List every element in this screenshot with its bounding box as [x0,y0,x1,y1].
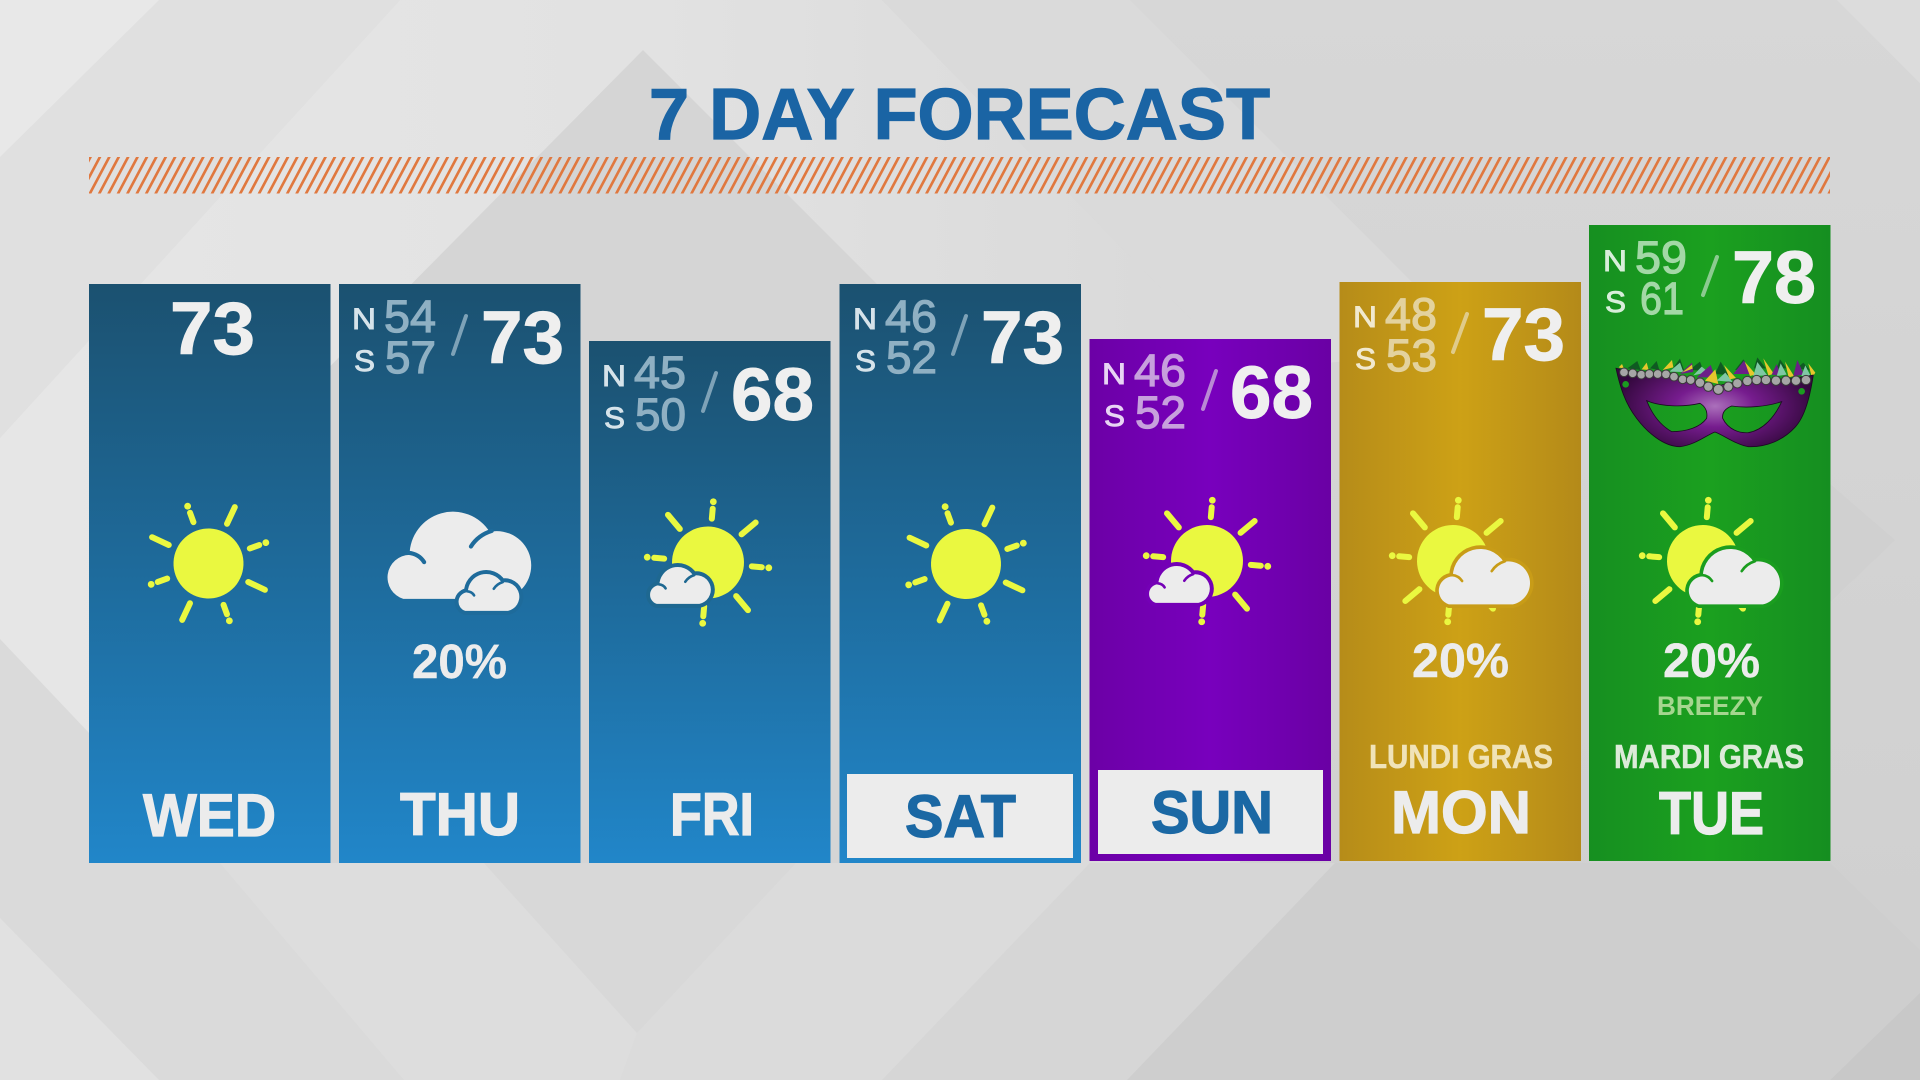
icon: sun behind cloud [1383,491,1530,631]
low and high temperatures: N [1353,301,1377,334]
low and high temperatures: 59 [1635,232,1687,283]
low and high temperatures: 48 [1385,289,1437,340]
precipitation chance: 20% [412,636,507,689]
low and high temperatures: N [853,303,877,336]
low and high temperatures: 61 [1640,273,1684,324]
mask beads [1620,368,1811,394]
low and high temperatures: 52 [1135,387,1186,438]
low and high temperatures: S [1605,286,1626,319]
low and high temperatures: 78 [1732,236,1816,319]
low and high temperatures: 57 [385,332,436,383]
icon: clouds [388,512,531,611]
event label: Mardi Gras: MARDI GRAS [1614,738,1804,775]
panel: Friday [589,341,830,863]
panel: Monday [1340,282,1581,861]
event label: Lundi Gras: LUNDI GRAS [1369,738,1553,775]
low and high temperatures [602,347,814,440]
day label box: SAT [847,774,1073,858]
icon: sun with small cloud [1137,491,1277,631]
day label: TUE: TUE [1659,780,1764,847]
low and high temperatures: 73 [981,296,1064,379]
low and high temperatures: N [602,360,626,393]
low and high temperatures: 73 [1482,293,1565,376]
day label box: SUN [1098,770,1323,854]
low and high temperatures: 54 [384,291,436,342]
icon: sun [883,481,1049,647]
low and high temperatures [1102,345,1313,438]
low and high temperatures: S [604,402,625,435]
low and high temperatures: 46 [885,291,937,342]
panel: Thursday [339,284,580,863]
day label: WED: WED [143,782,276,849]
day label box: SUN: SUN [1151,779,1273,846]
low and high temperatures: S [354,345,375,378]
low and high temperatures: N [1603,245,1627,278]
icon: sun behind cloud [1633,491,1780,631]
day label box: SAT: SAT [905,783,1016,850]
panel: Tuesday [1589,225,1830,861]
low and high temperatures: 46 [1134,345,1186,396]
precipitation chance: 20% [1663,635,1760,688]
low and high temperatures: 53 [1386,330,1437,381]
low and high temperatures: S [1104,400,1125,433]
icon: sun with small cloud [638,493,778,632]
panel: Sunday [1090,339,1331,861]
low and high temperatures [853,291,1064,383]
low and high temperatures: 68 [1230,351,1313,434]
mask face [1616,368,1813,447]
icon: Mardi Gras mask [1616,357,1815,447]
low and high temperatures [1603,232,1816,324]
precipitation chance: 20% [1412,635,1509,688]
low and high temperatures: 45 [634,347,686,398]
low and high temperatures [352,291,564,383]
low and high temperatures: 68 [731,353,814,436]
low and high temperatures: 73 [481,296,564,379]
low and high temperatures: N [352,303,376,336]
low and high temperatures: N [1102,358,1126,391]
high temperature: 73: 73 [170,287,255,370]
hatched orange divider [89,157,1830,194]
title: 7 DAY FORECAST [649,75,1270,155]
low and high temperatures: 50 [635,389,686,440]
panel: Saturday [840,284,1081,863]
low and high temperatures [1353,289,1565,381]
day label: THU: THU [400,781,520,848]
low and high temperatures: S [855,345,876,378]
mask feathers [1619,357,1815,384]
low and high temperatures: 52 [886,332,937,383]
icon: sun [126,481,291,646]
low and high temperatures: S [1355,343,1376,376]
weather note: breezy: BREEZY [1657,691,1763,721]
day label: FRI: FRI [670,781,754,848]
day label: MON: MON [1391,779,1531,846]
panel: Wednesday [89,284,330,863]
